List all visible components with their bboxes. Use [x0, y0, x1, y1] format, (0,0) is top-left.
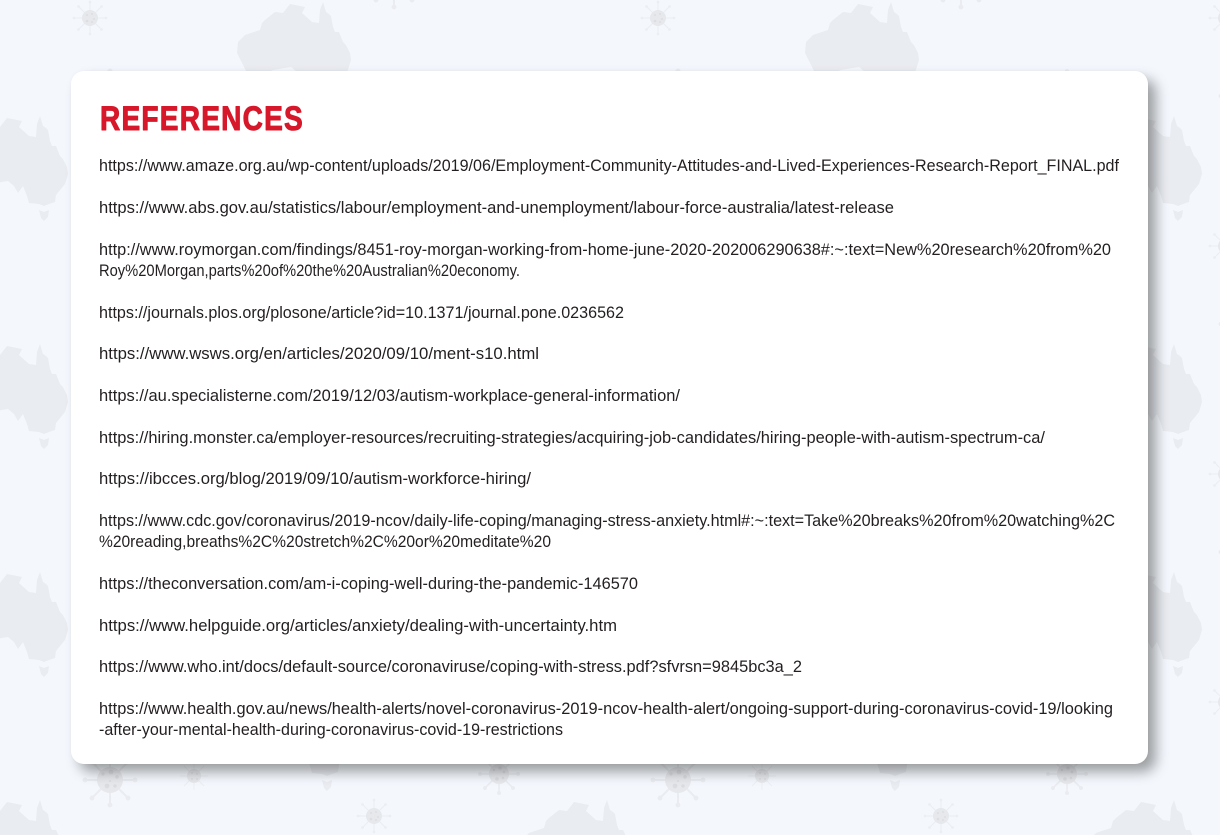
- reference 8: https://ibcces.org/blog/2019/09/10/autism-workforce-hiring/: [99, 470, 531, 488]
- reference 1: https://www.amaze.org.au/wp-content/uploads/2019/06/Employment-Community-Attitudes-and-Lived-Experiences-Research-Report_FINAL.pdf: [99, 157, 1119, 175]
- reference 4: https://journals.plos.org/plosone/article?id=10.1371/journal.pone.0236562: [99, 304, 624, 322]
- reference 2: https://www.abs.gov.au/statistics/labour/employment-and-unemployment/labour-force-australia/latest-release: [99, 199, 894, 217]
- heading: references: REFERENCES: [100, 100, 304, 138]
- reference 13: [99, 700, 1113, 739]
- reference list: [99, 157, 1119, 739]
- reference 5: https://www.wsws.org/en/articles/2020/09/10/ment-s10.html: [99, 345, 539, 363]
- reference 11: https://www.helpguide.org/articles/anxiety/dealing-with-uncertainty.htm: [99, 617, 617, 635]
- reference 7: https://hiring.monster.ca/employer-resources/recruiting-strategies/acquiring-job-candidates/hiring-people-with-autism-spectrum-ca/: [99, 429, 1045, 447]
- reference 13: -after-your-mental-health-during-coronavirus-covid-19-restrictions: [99, 721, 563, 739]
- reference 9: %20reading,breaths%2C%20stretch%2C%20or%20meditate%20: [99, 533, 551, 551]
- reference 13: https://www.health.gov.au/news/health-alerts/novel-coronavirus-2019-ncov-health-alert/ongoing-support-during-coronavirus-covid-19/looking: [99, 700, 1113, 718]
- reference 9: [99, 512, 1115, 551]
- reference 3: Roy%20Morgan,parts%20of%20the%20Australian%20economy.: [99, 262, 520, 280]
- reference 6: https://au.specialisterne.com/2019/12/03/autism-workplace-general-information/: [99, 387, 680, 405]
- panel: references card: [71, 71, 1148, 764]
- reference 3: http://www.roymorgan.com/findings/8451-roy-morgan-working-from-home-june-2020-202006290638#:~:text=New%20research%20from%20: [99, 241, 1111, 259]
- reference 10: https://theconversation.com/am-i-coping-well-during-the-pandemic-146570: [99, 575, 638, 593]
- reference 12: https://www.who.int/docs/default-source/coronaviruse/coping-with-stress.pdf?sfvrsn=9845bc3a_2: [99, 658, 802, 676]
- reference 9: https://www.cdc.gov/coronavirus/2019-ncov/daily-life-coping/managing-stress-anxiety.html#:~:text=Take%20breaks%20from%20watching%2C: [99, 512, 1115, 530]
- reference 3: [99, 241, 1111, 280]
